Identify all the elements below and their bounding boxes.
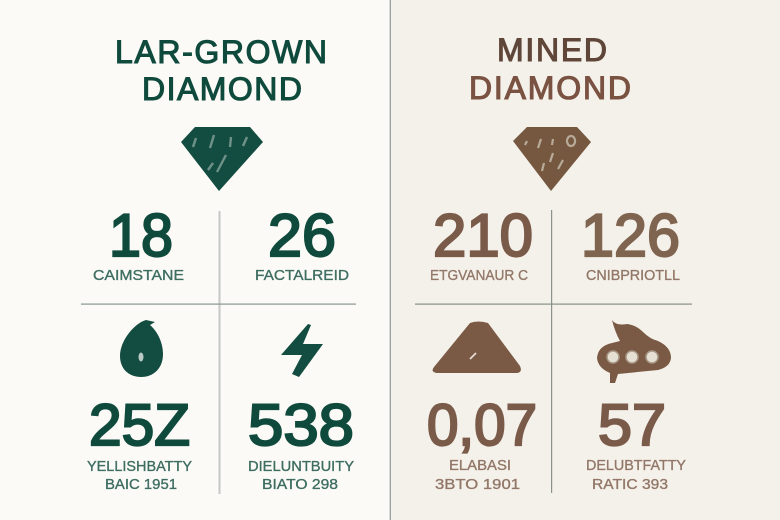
icon: mountain — [433, 322, 521, 373]
heading: lab-grown diamond: LAR-GROWN — [115, 34, 327, 70]
stat: 57 — [586, 393, 686, 493]
stat: 538: 538 — [248, 393, 354, 458]
icon: green diamond — [181, 127, 263, 191]
panel: mined diamond — [391, 0, 780, 520]
heading: mined diamond: MINED — [497, 32, 607, 68]
heading: mined diamond — [469, 32, 631, 106]
stat: 210: 210 — [433, 202, 533, 269]
stat: 25Z — [87, 393, 192, 493]
stat: 18: CAIMSTANE — [93, 267, 184, 284]
icon: ore cluster — [597, 320, 671, 383]
heading: lab-grown diamond — [115, 34, 327, 107]
stat: 538: DIELUNTBUITY — [248, 458, 354, 475]
icon: brown diamond — [513, 127, 591, 191]
panel: lab-grown diamond — [0, 0, 390, 520]
stat: 25Z: BAIC 1951 — [105, 476, 177, 493]
stat: 57: 57 — [598, 393, 666, 458]
stat: 18 — [93, 202, 184, 284]
stat: 57: RATIC 393 — [592, 476, 668, 493]
stat: 0,07 — [427, 393, 537, 493]
heading: mined diamond: DIAMOND — [469, 70, 631, 106]
stat: 538 — [248, 393, 354, 493]
stat: 0,07: 0,07 — [427, 393, 537, 458]
icon: lightning bolt — [281, 324, 323, 377]
stat: 0,07: 3BTO 1901 — [435, 476, 520, 493]
stat: 0,07: ELABASI — [449, 457, 511, 474]
stat: 26: 26 — [268, 202, 336, 269]
stat: 25Z: 25Z — [89, 393, 190, 458]
stat: 538: BIATO 298 — [262, 476, 338, 493]
icon: water drop — [120, 320, 163, 377]
stat: 57: DELUBTFATTY — [586, 457, 686, 474]
stat: 26 — [255, 202, 349, 284]
stat: 25Z: YELLISHBATTY — [87, 458, 192, 475]
stat: 26: FACTALREID — [255, 267, 349, 284]
heading: lab-grown diamond: DIAMOND — [142, 71, 302, 107]
stat: 126: CNIBPRIOTLL — [586, 267, 680, 284]
stat: 210: ETGVANAUR C — [430, 267, 528, 284]
stat: 126: 126 — [581, 202, 680, 269]
stat: 18: 18 — [109, 202, 173, 269]
